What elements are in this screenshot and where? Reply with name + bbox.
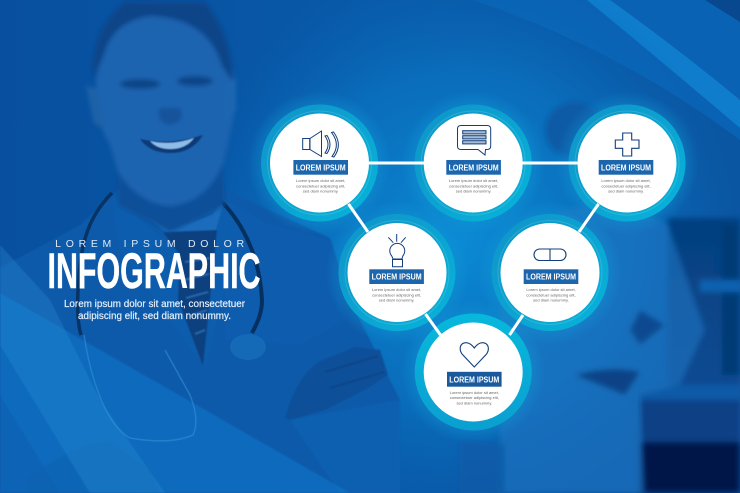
stethoscope (78, 193, 112, 335)
doctor photo (0, 2, 400, 493)
body text: Lorem ipsum dolor sit amet, (450, 390, 499, 395)
body text (526, 287, 576, 303)
coat (0, 190, 400, 493)
icon: heart (460, 343, 488, 367)
body text (450, 390, 499, 405)
chest piece (230, 334, 266, 360)
smile (140, 135, 203, 153)
subtitle: Lorem ipsum dolor sit amet, consectetuer (64, 299, 246, 310)
body text (296, 178, 345, 194)
label: LOREM IPSUM (526, 273, 576, 282)
panel: node 1 speaker (261, 104, 378, 222)
body text: consectetuer adipiscing elit, (601, 183, 651, 188)
panel: node 3 cross (568, 104, 686, 222)
panel: node 4 light bulb (338, 214, 456, 331)
eyebrow: LOREM IPSUM DOLOR (55, 238, 249, 250)
panel: node 5 pill (492, 214, 608, 331)
body text: sed diam nonummy. (303, 189, 339, 194)
icon: speaker (303, 131, 338, 157)
tie (163, 230, 217, 366)
icon: light bulb (388, 234, 406, 267)
colleague silhouette (460, 102, 705, 493)
body text: Lorem ipsum dolor sit amet, (372, 287, 421, 292)
body text (372, 287, 421, 303)
subtitle (64, 299, 246, 322)
body text: consectetuer adipiscing elit, (450, 395, 499, 400)
icon: message bubble (458, 126, 491, 155)
shirt (112, 195, 240, 368)
body text: sed diam nonummy. (456, 189, 491, 194)
label: LOREM IPSUM (449, 375, 499, 384)
label: LOREM IPSUM (296, 163, 346, 172)
body text (601, 178, 651, 194)
panel: node 6 heart (415, 314, 532, 430)
head (86, 2, 236, 232)
icon: medical cross (615, 133, 639, 156)
light wave top right (473, 0, 740, 140)
translucent overlays (0, 293, 350, 493)
icon: pill (534, 249, 566, 260)
body text: Lorem ipsum dolor sit amet, (526, 287, 576, 292)
body text: consectetuer adipiscing elit, (449, 183, 498, 188)
body text: consectetuer adipiscing elit, (526, 292, 576, 297)
label: LOREM IPSUM (372, 273, 422, 282)
window and floor (640, 218, 740, 493)
body text: consectetuer adipiscing elit, (296, 183, 345, 188)
connector lines (348, 163, 598, 335)
body text: Lorem ipsum dolor sit amet, (449, 178, 498, 183)
label: LOREM IPSUM (601, 163, 651, 172)
body text (449, 178, 498, 194)
body text: consectetuer adipiscing elit, (372, 292, 421, 297)
subtitle: adipiscing elit, sed diam nonummy. (78, 311, 231, 322)
title: INFOGRAPHIC (48, 243, 260, 299)
body text: Lorem ipsum dolor sit amet, (296, 178, 345, 183)
panel: node 2 message (415, 104, 532, 222)
label: LOREM IPSUM (449, 163, 499, 172)
body text: sed diam nonummy. (379, 298, 414, 303)
crossed hands (285, 347, 388, 420)
body text: Lorem ipsum dolor sit amet, (601, 178, 651, 183)
title block (48, 238, 260, 322)
body text: sed diam nonummy. (533, 298, 569, 303)
body text: sed diam nonummy. (456, 400, 492, 405)
glow behind circles (248, 91, 699, 444)
body text: sed diam nonummy. (608, 189, 644, 194)
